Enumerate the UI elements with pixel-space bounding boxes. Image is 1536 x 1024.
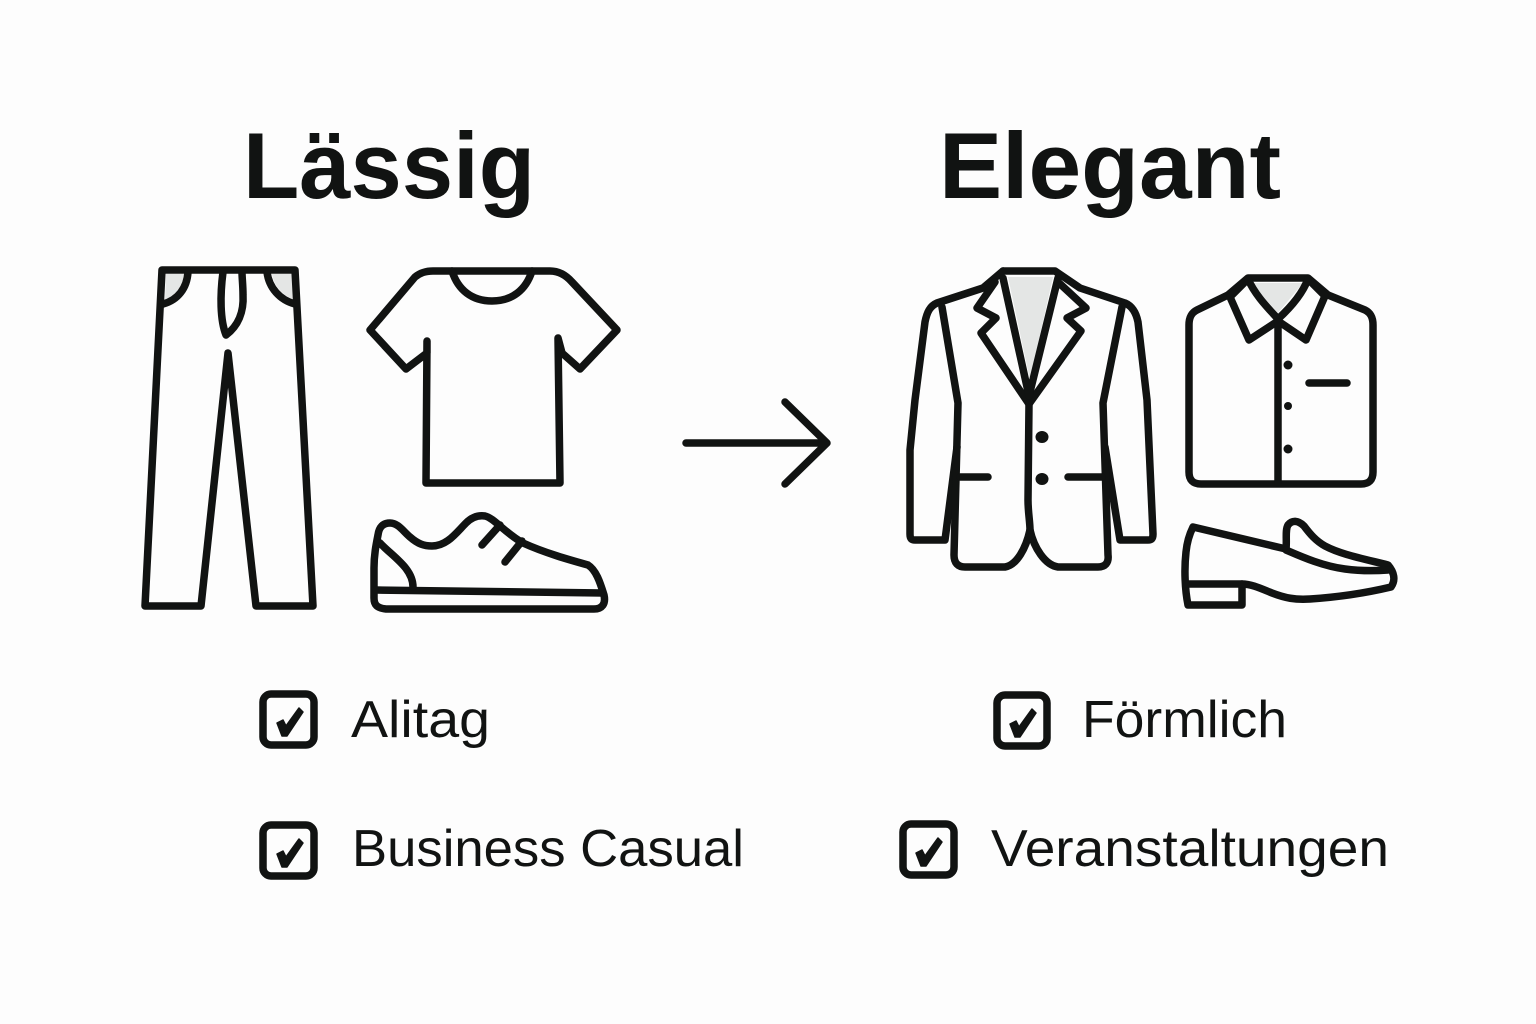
check item: Business Casual: Business Casual — [352, 820, 744, 878]
checklist: Elegant — [903, 691, 1389, 878]
icon: trousers — [145, 270, 313, 606]
heading: Elegant: Elegant — [939, 113, 1281, 218]
check item: Veranstaltungen: Veranstaltungen — [991, 820, 1389, 878]
heading: Lässig: Lässig — [243, 113, 535, 218]
arrow — [686, 402, 827, 484]
check item: Förmlich: Förmlich — [1082, 691, 1287, 749]
icon: t-shirt — [370, 271, 617, 483]
icon: loafer — [1185, 521, 1394, 605]
check item: Förmlich — [997, 691, 1287, 749]
checklist: Lässig — [263, 691, 744, 878]
check item: Alitag: Alitag — [351, 691, 490, 749]
icon: dress shirt — [1189, 278, 1373, 484]
icon: blazer — [910, 271, 1153, 567]
check item: Alitag — [263, 691, 490, 749]
icon: sneaker — [374, 516, 605, 609]
